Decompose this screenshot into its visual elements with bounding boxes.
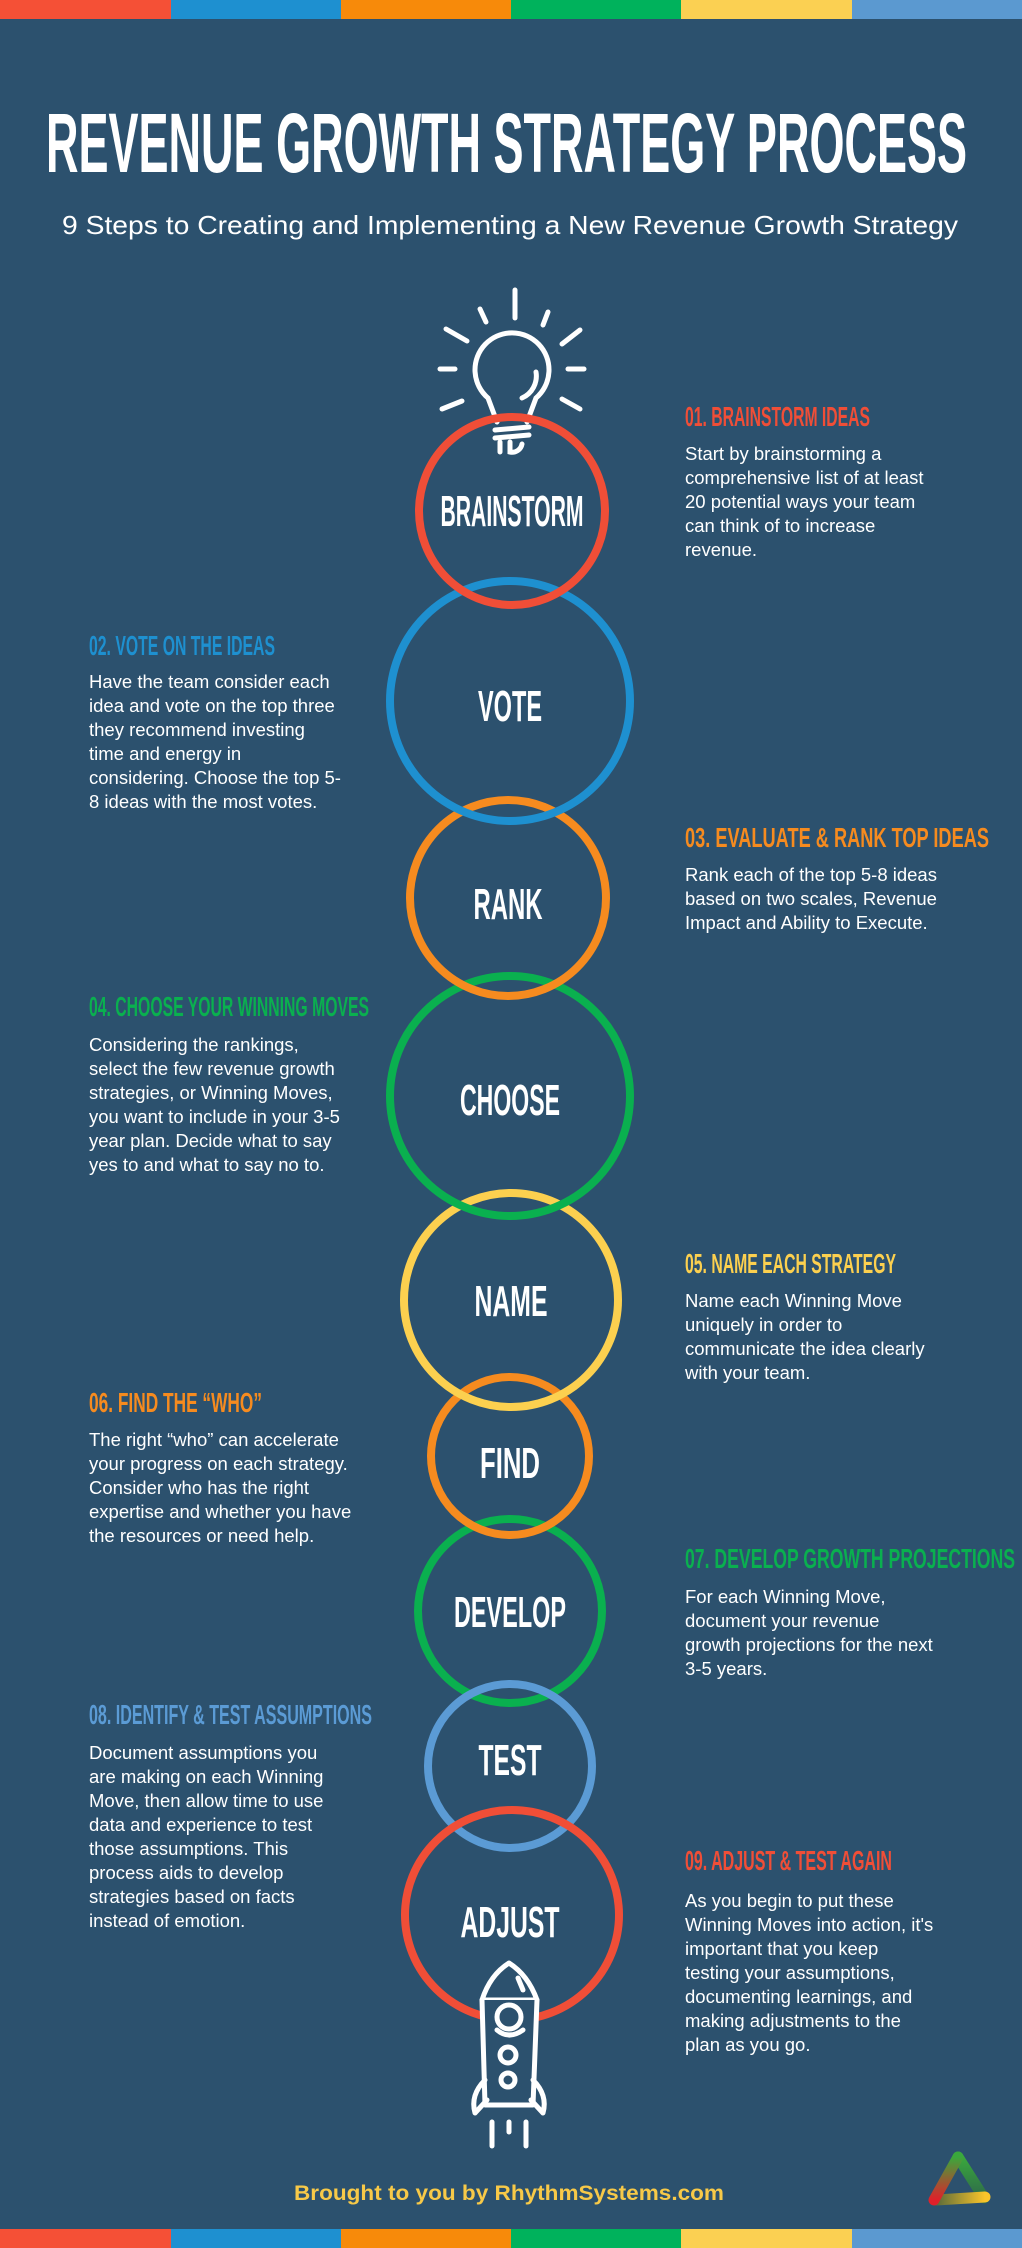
step 08 text: those assumptions. This: [89, 1838, 288, 1859]
step 09 text: important that you keep: [685, 1938, 878, 1959]
text: BRAINSTORM: [440, 487, 584, 536]
step 05 text: uniquely in order to: [685, 1314, 842, 1335]
circle labels: RANK: [474, 880, 543, 929]
step 07 text: 3-5 years.: [685, 1658, 767, 1679]
step 02 text: they recommend investing: [89, 719, 305, 740]
step 04 text: [89, 991, 369, 1175]
step 04 text: strategies, or Winning Moves,: [89, 1082, 333, 1103]
circle labels: NAME: [474, 1277, 548, 1326]
icon: rocket: [474, 1963, 544, 2146]
step 06 text: your progress on each strategy.: [89, 1453, 348, 1474]
step 06 text: expertise and whether you have: [89, 1501, 351, 1522]
step 02 text: idea and vote on the top three: [89, 695, 335, 716]
step 08 text: strategies based on facts: [89, 1886, 295, 1907]
step 04 text: Considering the rankings,: [89, 1034, 299, 1055]
step 03 text: Rank each of the top 5-8 ideas: [685, 864, 937, 885]
step 02 text: 8 ideas with the most votes.: [89, 791, 317, 812]
step 01 text: can think of to increase: [685, 515, 875, 536]
step 01 text: [685, 401, 924, 560]
step 05 text: with your team.: [684, 1362, 810, 1383]
step 09 text: As you begin to put these: [685, 1890, 894, 1911]
step 08 text: Move, then allow time to use: [89, 1790, 323, 1811]
circle labels: CHOOSE: [460, 1076, 560, 1125]
step 01 text: revenue.: [685, 539, 757, 560]
bottom color bar: [0, 2229, 1022, 2248]
step 02 text: time and energy in: [89, 743, 241, 764]
step 09 text: plan as you go.: [685, 2034, 810, 2055]
step 05 text: [684, 1248, 925, 1383]
step 01 text: 20 potential ways your team: [685, 491, 915, 512]
step 06 text: Consider who has the right: [89, 1477, 309, 1498]
logo: triangle: [934, 2157, 985, 2200]
circles chain: [390, 417, 630, 2020]
step 08 text: Document assumptions you: [89, 1742, 317, 1763]
step 07 text: document your revenue: [685, 1610, 879, 1631]
step 08 text: [89, 1699, 372, 1931]
step 09 text: making adjustments to the: [685, 2010, 901, 2031]
step 05 text: communicate the idea clearly: [685, 1338, 925, 1359]
step 09 text: [685, 1845, 933, 2055]
step 09 text: testing your assumptions,: [685, 1962, 895, 1983]
subtitle: 9 Steps to Creating and Implementing a New Revenue Growth Strategy: [62, 210, 958, 240]
step 03 text: based on two scales, Revenue: [685, 888, 937, 909]
step 04 text: year plan. Decide what to say: [89, 1130, 332, 1151]
step 05 text: Name each Winning Move: [685, 1290, 902, 1311]
step 08 text: instead of emotion.: [89, 1910, 245, 1931]
step 08 text: are making on each Winning: [89, 1766, 323, 1787]
top color bar: [0, 0, 1022, 19]
step 09 text: Winning Moves into action, it's: [685, 1914, 933, 1935]
circle labels: DEVELOP: [454, 1588, 566, 1637]
circle labels: FIND: [480, 1439, 540, 1488]
circle labels: [440, 487, 584, 1947]
step 02 text: [89, 630, 341, 812]
step 08 text: process aids to develop: [89, 1862, 283, 1883]
circle labels: TEST: [478, 1736, 542, 1785]
step 06 text: the resources or need help.: [89, 1525, 314, 1546]
step 08 text: 08. IDENTIFY & TEST ASSUMPTIONS: [89, 1699, 372, 1730]
step 07 text: [685, 1543, 1015, 1679]
circle labels: VOTE: [478, 682, 542, 731]
step 06 text: 06. FIND THE “WHO”: [89, 1387, 262, 1418]
step 06 text: The right “who” can accelerate: [89, 1429, 339, 1450]
step 02 text: Have the team consider each: [89, 671, 330, 692]
step 03 text: Impact and Ability to Execute.: [685, 912, 928, 933]
icon: lightbulb: [440, 290, 584, 452]
step 01 text: comprehensive list of at least: [685, 467, 924, 488]
step 04 text: 04. CHOOSE YOUR WINNING MOVES: [89, 991, 369, 1022]
step 08 text: data and experience to test: [89, 1814, 312, 1835]
step 06 text: [89, 1387, 351, 1546]
footer credit: Brought to you by RhythmSystems.com: [294, 2182, 724, 2205]
step 04 text: select the few revenue growth: [89, 1058, 335, 1079]
step 04 text: yes to and what to say no to.: [89, 1154, 325, 1175]
step 04 text: you want to include in your 3-5: [89, 1106, 340, 1127]
step 01 text: 01. BRAINSTORM IDEAS: [685, 401, 870, 432]
step 07 text: For each Winning Move,: [685, 1586, 886, 1607]
step 09 text: documenting learnings, and: [685, 1986, 912, 2007]
step 02 text: considering. Choose the top 5-: [89, 767, 341, 788]
circle labels: ADJUST: [460, 1898, 560, 1947]
step 02 text: 02. VOTE ON THE IDEAS: [89, 630, 275, 661]
step 03 text: [685, 822, 989, 933]
step 07 text: growth projections for the next: [685, 1634, 933, 1655]
step 01 text: Start by brainstorming a: [685, 443, 882, 464]
